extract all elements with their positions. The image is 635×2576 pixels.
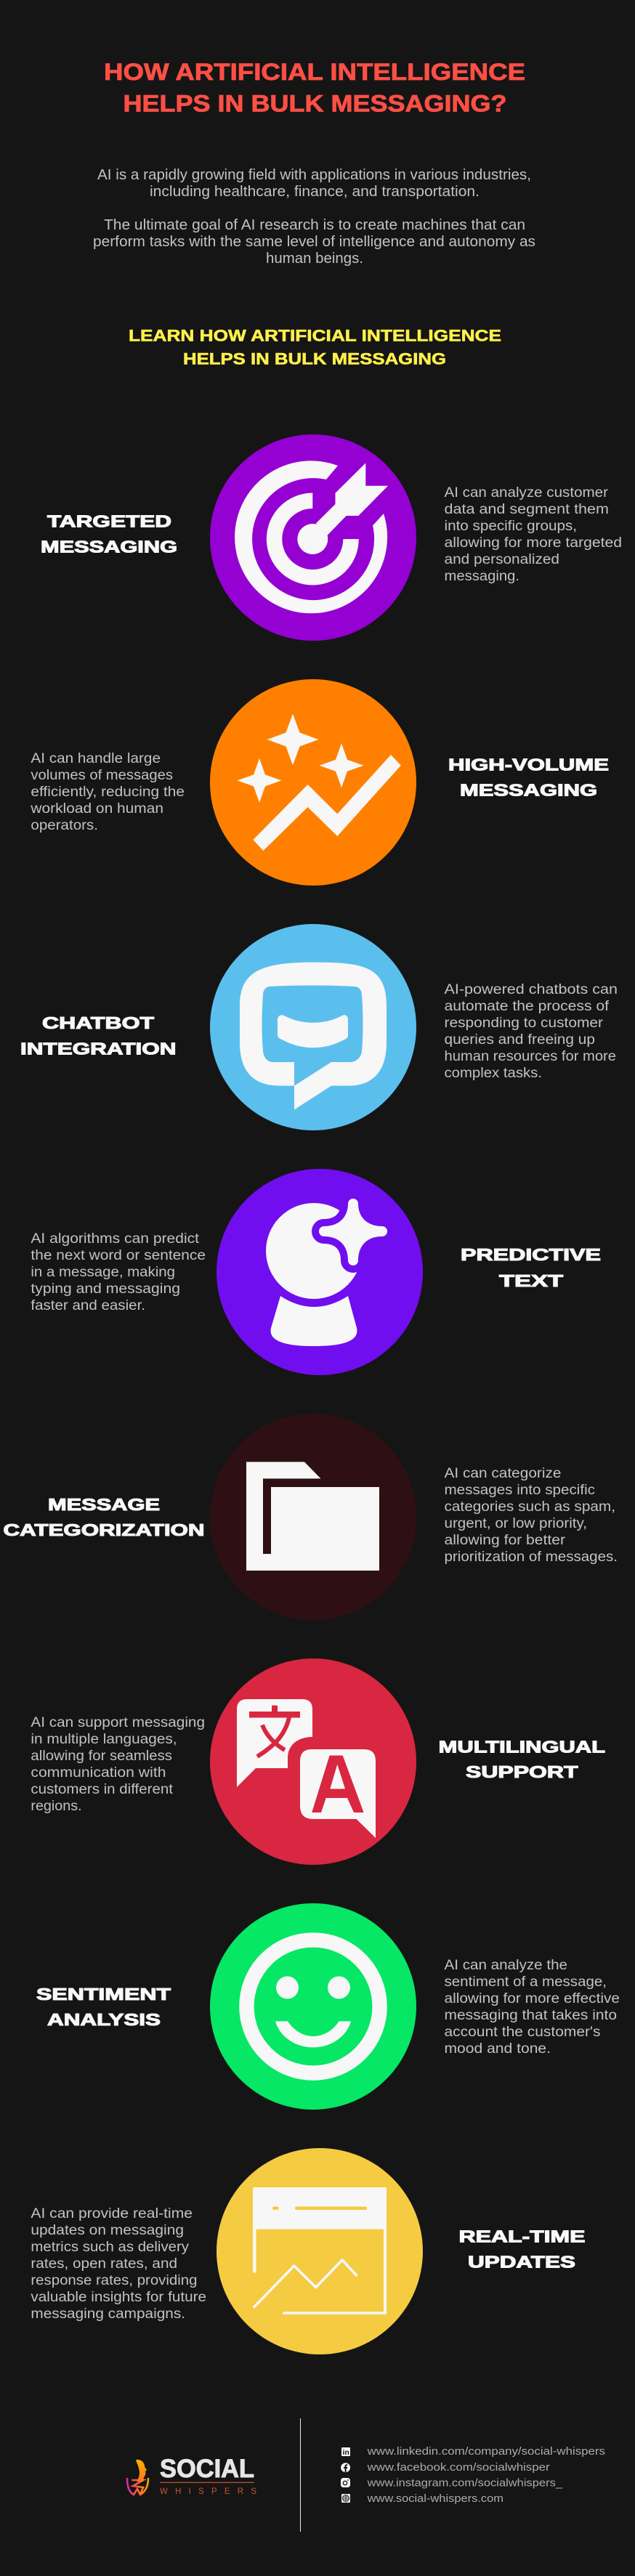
icon: folder	[210, 1414, 416, 1620]
panel: real-time updates	[31, 2148, 585, 2354]
panel: high-volume messaging	[30, 679, 609, 886]
description: message categorization: messages into specific	[445, 1483, 595, 1498]
description: predictive text: faster and easier.	[31, 1298, 145, 1313]
panel: predictive text	[31, 1169, 601, 1375]
icon: crystal ball with sparkle	[217, 1169, 423, 1375]
description: targeted messaging: messaging.	[445, 569, 519, 584]
logo wordmark: WHISPERS	[160, 2487, 256, 2496]
intro text	[93, 167, 535, 267]
description: high-volume messaging: AI can handle large	[31, 751, 161, 766]
heading: high-volume messaging: HIGH-VOLUME	[448, 756, 609, 774]
subheading: LEARN HOW ARTIFICIAL INTELLIGENCE	[129, 327, 501, 344]
heading: message categorization	[3, 1495, 205, 1539]
icon: website globe	[341, 2494, 350, 2503]
description: sentiment analysis: messaging that takes into	[445, 2008, 617, 2023]
description: sentiment analysis: sentiment of a message,	[445, 1974, 607, 1990]
description: multilingual support: customers in different	[31, 1782, 174, 1797]
description: chatbot integration	[445, 982, 618, 1081]
icon: analytics window	[217, 2148, 423, 2354]
icon: logo emblem	[127, 2460, 148, 2495]
intro text: perform tasks with the same level of intelligence and autonomy as	[93, 234, 535, 250]
description: targeted messaging: AI can analyze customer	[445, 485, 609, 501]
icon: facebook	[341, 2463, 350, 2472]
link: website: www.social-whispers.com	[366, 2493, 503, 2505]
description: real-time updates: response rates, providing	[31, 2273, 198, 2288]
heading: predictive text: PREDICTIVE	[461, 1245, 601, 1264]
description: high-volume messaging: workload on human	[30, 801, 163, 817]
logo wordmark	[160, 2455, 256, 2496]
intro text: human beings.	[266, 251, 363, 267]
description: predictive text: AI algorithms can predict	[31, 1231, 200, 1247]
description: message categorization: prioritization of messages.	[445, 1550, 618, 1565]
heading: chatbot integration	[20, 1013, 176, 1058]
heading: sentiment analysis	[36, 1985, 171, 2029]
description: multilingual support: AI can support messaging	[31, 1715, 205, 1730]
heading: multilingual support	[439, 1738, 605, 1781]
description: message categorization: urgent, or low priority,	[445, 1516, 587, 1531]
description: multilingual support: communication with	[31, 1765, 166, 1781]
description: targeted messaging: into specific groups,	[445, 519, 577, 534]
heading: sentiment analysis: ANALYSIS	[47, 2010, 161, 2029]
heading: message categorization: CATEGORIZATION	[3, 1520, 205, 1539]
description: chatbot integration: automate the process of	[445, 999, 610, 1014]
divider	[300, 2418, 301, 2532]
description: chatbot integration: queries and freeing up	[445, 1032, 595, 1048]
description: real-time updates: updates on messaging	[31, 2223, 184, 2238]
heading: chatbot integration: CHATBOT	[42, 1013, 154, 1032]
footer links	[341, 2446, 605, 2505]
heading: predictive text: TEXT	[499, 1271, 563, 1290]
footer logo: Social Whispers	[127, 2455, 256, 2496]
icon: instagram	[341, 2478, 350, 2487]
panel: sentiment analysis	[36, 1903, 620, 2110]
description: chatbot integration: AI-powered chatbots can	[445, 982, 618, 997]
description: chatbot integration: human resources for more	[445, 1049, 616, 1064]
description: real-time updates: valuable insights for future	[31, 2290, 206, 2305]
description: predictive text: the next word or sentence	[31, 1248, 206, 1263]
link: linkedin: www.linkedin.com/company/social-whispers	[366, 2446, 605, 2458]
description: multilingual support: in multiple languages,	[31, 1732, 177, 1747]
description: sentiment analysis: account the customer's	[445, 2025, 600, 2040]
heading: sentiment analysis: SENTIMENT	[36, 1985, 171, 2004]
description: message categorization: AI can categorize	[445, 1466, 561, 1481]
heading: multilingual support: MULTILINGUAL	[439, 1738, 605, 1757]
description: chatbot integration: complex tasks.	[445, 1066, 542, 1081]
heading: targeted messaging: TARGETED	[47, 511, 171, 530]
heading: predictive text	[461, 1245, 601, 1290]
description: real-time updates: metrics such as delivery	[31, 2240, 190, 2255]
subheading: HELPS IN BULK MESSAGING	[183, 350, 446, 368]
description: targeted messaging: data and segment them	[445, 502, 609, 517]
heading: multilingual support: SUPPORT	[466, 1762, 578, 1781]
description: sentiment analysis: mood and tone.	[445, 2041, 551, 2057]
description: high-volume messaging: operators.	[31, 818, 98, 833]
description: targeted messaging: and personalized	[445, 552, 559, 567]
panel: targeted messaging	[41, 434, 622, 641]
icon: translation bubbles	[210, 1658, 416, 1865]
intro text: AI is a rapidly growing field with applications in various industries,	[97, 167, 531, 183]
icon: target with arrow	[210, 434, 416, 641]
icon: linkedin: in	[343, 2448, 349, 2457]
description: high-volume messaging	[30, 751, 185, 833]
description: message categorization: categories such as spam,	[445, 1499, 615, 1515]
link: facebook: www.facebook.com/socialwhisper	[366, 2462, 550, 2474]
description: targeted messaging	[445, 485, 622, 584]
title	[104, 59, 525, 116]
description: message categorization: allowing for better	[445, 1533, 566, 1548]
description: multilingual support: regions.	[31, 1799, 82, 1814]
panel: chatbot integration	[20, 924, 618, 1130]
panel: message categorization	[3, 1414, 618, 1620]
title: HELPS IN BULK MESSAGING?	[124, 90, 507, 116]
icon: chatbot speech bubble	[210, 924, 416, 1130]
description: high-volume messaging: volumes of messages	[31, 768, 173, 783]
heading: targeted messaging: MESSAGING	[41, 538, 177, 556]
description: message categorization	[445, 1466, 618, 1565]
heading: high-volume messaging: MESSAGING	[460, 780, 597, 799]
heading: message categorization: MESSAGE	[48, 1495, 160, 1514]
description: multilingual support	[31, 1715, 205, 1814]
description: sentiment analysis: allowing for more effective	[445, 1991, 620, 2006]
intro text: including healthcare, finance, and transportation.	[150, 184, 480, 200]
description: high-volume messaging: efficiently, reducing the	[31, 785, 185, 800]
description: real-time updates: messaging campaigns.	[31, 2306, 185, 2322]
heading: high-volume messaging	[448, 756, 609, 799]
heading: chatbot integration: INTEGRATION	[20, 1039, 176, 1058]
link: instagram: www.instagram.com/socialwhispers_	[366, 2477, 563, 2489]
intro text: The ultimate goal of AI research is to create machines that can	[104, 217, 525, 233]
subheading	[129, 327, 501, 368]
heading: targeted messaging	[41, 511, 177, 556]
panel: multilingual support	[31, 1658, 605, 1865]
description: targeted messaging: allowing for more targeted	[445, 535, 622, 551]
description: real-time updates: AI can provide real-time	[31, 2206, 193, 2221]
heading: real-time updates	[459, 2227, 586, 2271]
description: real-time updates: rates, open rates, and	[31, 2256, 177, 2272]
icon: sparkles and rising line	[210, 679, 416, 886]
description: predictive text: in a message, making	[31, 1265, 175, 1280]
heading: real-time updates: REAL-TIME	[459, 2227, 586, 2246]
icon: smiley face	[210, 1903, 416, 2110]
description: predictive text: typing and messaging	[31, 1281, 180, 1297]
description: sentiment analysis	[445, 1958, 620, 2057]
description: chatbot integration: responding to customer	[445, 1016, 604, 1031]
heading: real-time updates: UPDATES	[468, 2252, 575, 2271]
description: multilingual support: allowing for seamless	[31, 1749, 172, 1764]
description: predictive text	[31, 1231, 206, 1313]
title: HOW ARTIFICIAL INTELLIGENCE	[104, 59, 525, 85]
description: sentiment analysis: AI can analyze the	[445, 1958, 567, 1973]
logo wordmark: SOCIAL	[160, 2455, 254, 2483]
description: real-time updates	[31, 2206, 206, 2322]
